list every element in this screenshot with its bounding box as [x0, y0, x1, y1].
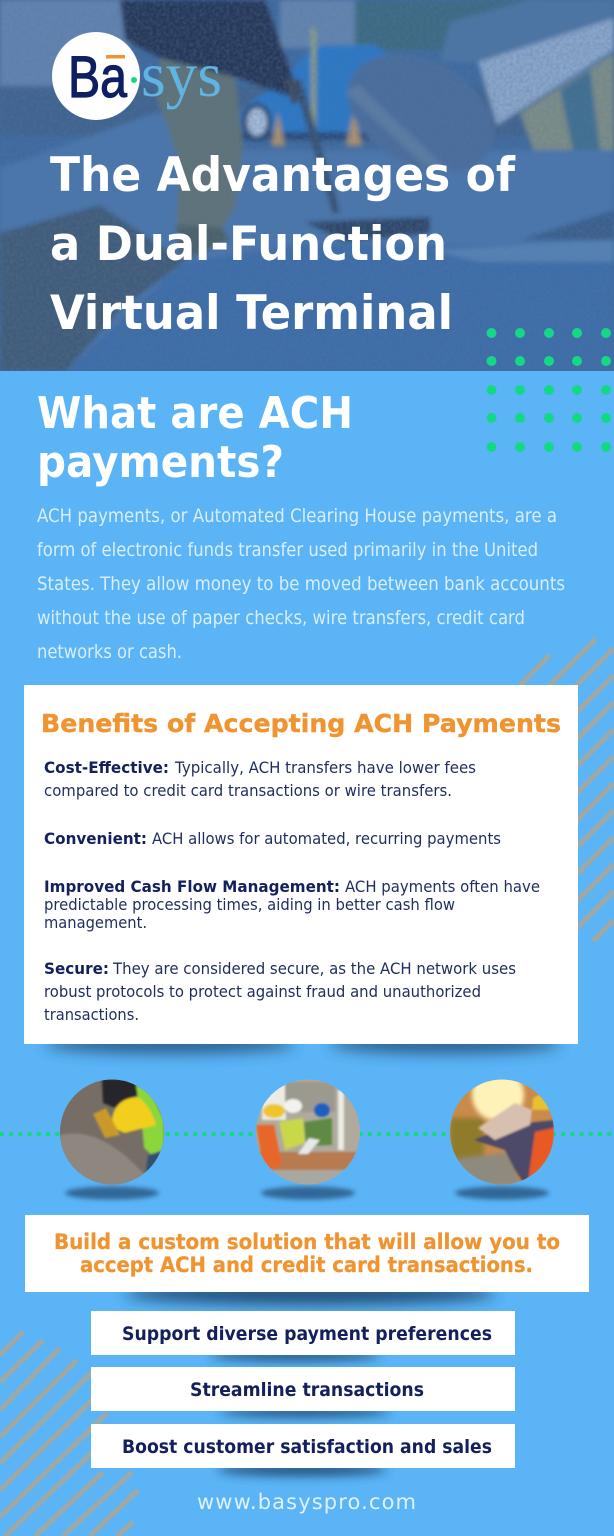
paragraph: ACH definition	[37, 505, 565, 663]
benefit: secure: They are considered secure, as the ACH network uses	[112, 959, 516, 978]
hero photo: worker pouring concrete	[0, 0, 614, 371]
callout: build a custom solution: accept ACH and credit card transactions.	[80, 1253, 533, 1277]
benefit: secure: transactions.	[44, 1005, 139, 1024]
dotted line	[0, 1132, 614, 1136]
card shadow	[45, 1034, 560, 1054]
website url: www.basyspro.com	[197, 1490, 416, 1514]
benefit: secure	[44, 959, 516, 1024]
title	[50, 148, 516, 341]
title: The Advantages of	[50, 148, 516, 203]
paragraph: ACH definition: without the use of paper checks, wire transfers, credit card	[37, 607, 525, 629]
benefit: secure: Secure:	[44, 959, 109, 978]
benefit: cost-effective: Cost-Effective:	[44, 758, 169, 777]
benefit: improved cash flow management: predictable processing times, aiding in better cash flow	[44, 895, 455, 914]
benefit: cost-effective: compared to credit card transactions or wire transfers.	[44, 781, 452, 800]
title: Virtual Terminal	[50, 286, 453, 341]
paragraph: ACH definition: networks or cash.	[37, 641, 182, 663]
heading: What are ACH payments: payments?	[37, 437, 284, 488]
photo: worker with yellow hard hat	[60, 1079, 164, 1200]
panel: benefits of accepting ACH payments	[24, 685, 578, 1044]
photo: worker shading eyes at sunset	[450, 1069, 554, 1200]
benefit: cost-effective: Typically, ACH transfers have lower fees	[174, 758, 476, 777]
callout: build a custom solution	[25, 1215, 589, 1292]
callout: build a custom solution: Build a custom solution that will allow you to	[54, 1230, 560, 1254]
paragraph: ACH definition: form of electronic funds transfer used primarily in the United	[37, 539, 538, 561]
benefit: convenient: Convenient:	[44, 829, 147, 848]
benefit button: boost customer satisfaction	[91, 1424, 515, 1468]
benefit: convenient: ACH allows for automated, recurring payments	[152, 829, 501, 848]
benefit button: streamline transactions: Streamline transactions	[190, 1379, 424, 1401]
benefit button: boost customer satisfaction: Boost customer satisfaction and sales	[122, 1436, 492, 1458]
benefit button: streamline transactions	[91, 1367, 515, 1411]
benefit: improved cash flow management: ACH payments often have	[345, 877, 540, 896]
button shadows	[210, 1351, 390, 1476]
logo: Basys: sys	[141, 39, 222, 110]
benefit: secure: robust protocols to protect against fraud and unauthorized	[44, 982, 481, 1001]
panel heading: Benefits of Accepting ACH Payments	[41, 709, 561, 738]
diagonal stripes: right	[520, 639, 614, 941]
logo: Basys: Ba	[68, 45, 128, 110]
green dot grid	[486, 328, 611, 452]
logo: Basys	[52, 32, 222, 120]
benefit button: support diverse payment preferences: Support diverse payment preferences	[122, 1323, 492, 1345]
heading: What are ACH payments	[37, 388, 353, 488]
callout shadow	[121, 1292, 499, 1311]
benefit: improved cash flow management: Improved Cash Flow Management:	[44, 877, 340, 896]
benefit button: support diverse payment preferences	[91, 1311, 515, 1355]
benefit: improved cash flow management	[44, 877, 540, 932]
photo: three workers with laptop	[256, 1079, 360, 1200]
benefit: improved cash flow management: management.	[44, 913, 147, 932]
diagonal stripes: bottom left	[0, 1332, 138, 1536]
heading: What are ACH payments: What are ACH	[37, 388, 353, 439]
title: a Dual-Function	[50, 217, 447, 272]
benefit: cost-effective	[44, 758, 476, 800]
